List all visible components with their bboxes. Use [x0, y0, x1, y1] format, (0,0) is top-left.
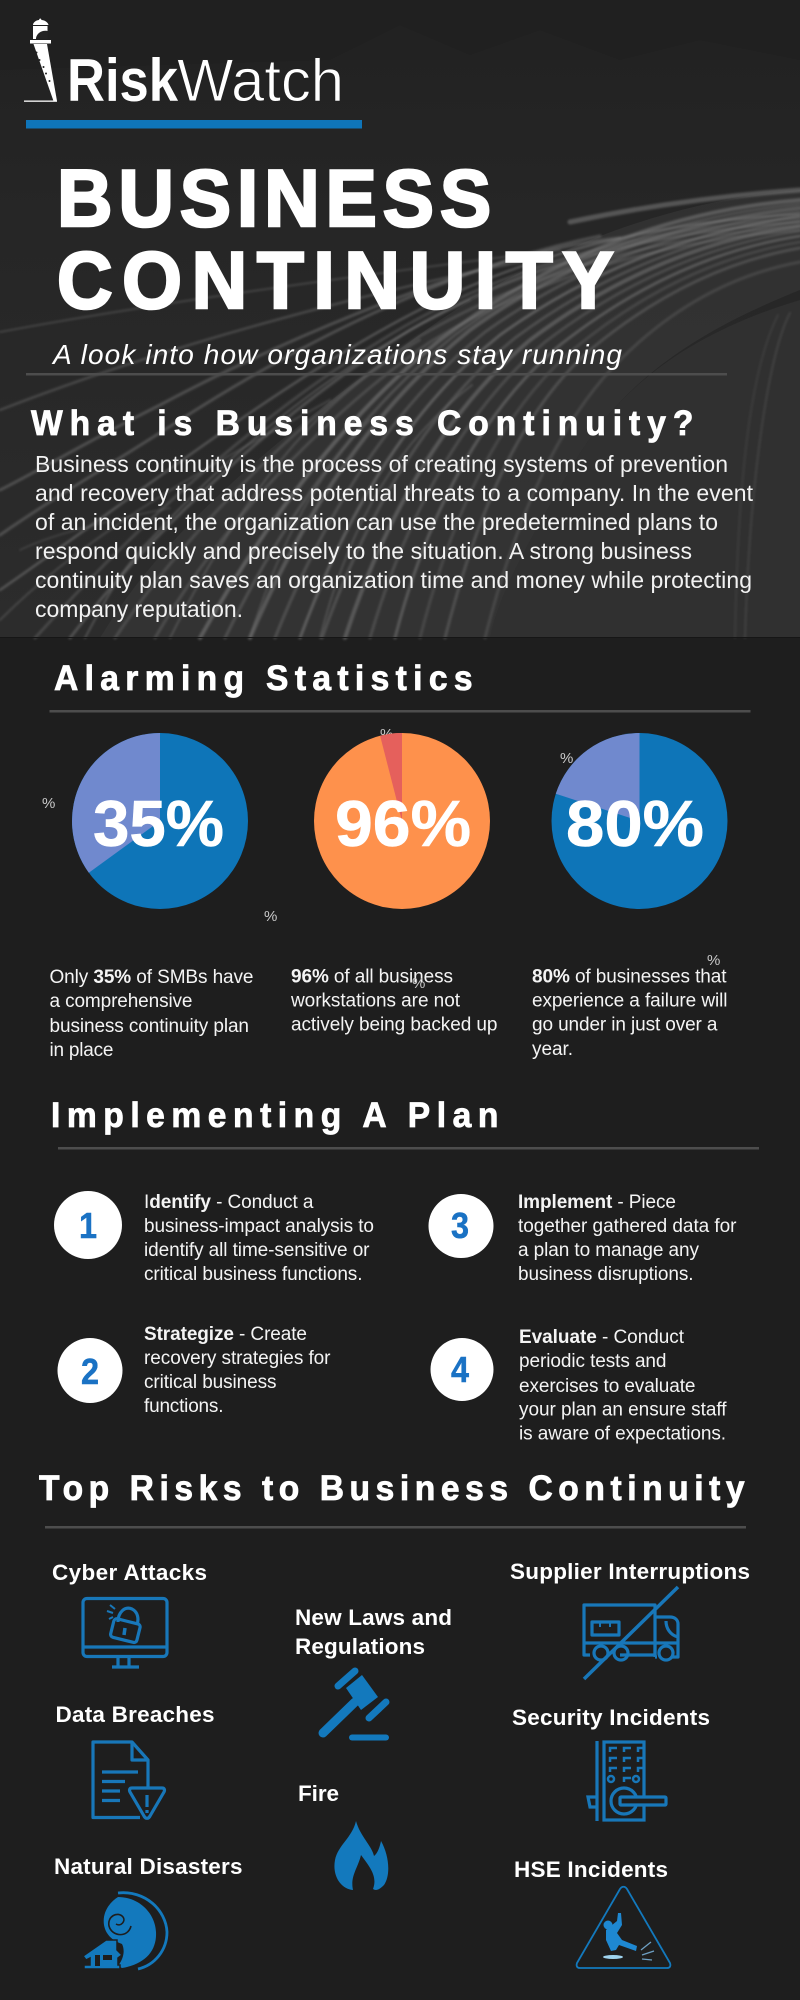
label: Fire: Fire — [298, 1781, 339, 1806]
stat text: 96% of workstations: actively being backed up — [291, 1014, 498, 1036]
icon: lighthouse — [24, 18, 57, 102]
text block: definition of business continuity: of an incident, the organization can use the predetermined plans to — [35, 509, 718, 535]
heading: Alarming Statistics: Alarming Statistics — [54, 659, 473, 698]
stray percent label over stat text: % — [412, 975, 425, 992]
stat text: 35% of SMBs: in place — [50, 1040, 114, 1061]
step 4 badge — [430, 1338, 494, 1401]
label: Natural Disasters: Natural Disasters — [54, 1854, 242, 1879]
step 4 text: periodic tests and — [519, 1351, 666, 1372]
step 2 text: Strategize - Create — [144, 1324, 307, 1345]
icon: document with warning — [93, 1742, 164, 1818]
chart: 96% pie: 96% — [335, 787, 471, 860]
text block: definition of business continuity: respond quickly and precisely to the situation. A strong business — [35, 538, 692, 564]
heading: Implementing A Plan: Implementing A Plan — [51, 1096, 498, 1135]
stat text: 35% of SMBs: a comprehensive — [50, 991, 192, 1012]
title: BUSINESS — [57, 152, 491, 243]
title: CONTINUITY — [57, 234, 614, 325]
stray percent labels: % — [380, 726, 393, 743]
heading: What is Business Continuity?: What is Business Continuity? — [31, 404, 693, 443]
stray percent labels: % — [264, 908, 277, 925]
step 4 text: Evaluate - Conduct — [519, 1327, 685, 1348]
step 2 text — [144, 1324, 331, 1417]
text: Watch: Watch — [177, 47, 344, 114]
icon: monitor with broken padlock — [83, 1598, 167, 1667]
stat text: 96% of workstations — [290, 966, 498, 1036]
step 1 text — [144, 1192, 374, 1285]
label: New Laws and Regulations — [295, 1605, 452, 1659]
label: Security Incidents: Security Incidents — [512, 1705, 710, 1730]
step 4 badge: 4 — [451, 1350, 469, 1390]
stat text: 80% of businesses: 80% of businesses that — [532, 966, 727, 988]
subtitle: A look into how organizations stay running — [51, 339, 622, 370]
step 1 text: critical business functions. — [144, 1264, 362, 1285]
chart: 35% pie — [72, 733, 248, 909]
step 4 text: exercises to evaluate — [519, 1376, 696, 1397]
step 2 text: functions. — [144, 1396, 224, 1417]
text block: definition of business continuity — [35, 451, 754, 622]
label: New Laws and Regulations: Regulations — [295, 1634, 425, 1659]
chart: 35% pie: 35% — [93, 787, 224, 860]
stray percent labels: % — [42, 795, 55, 812]
icon: tidal wave over house — [83, 1893, 167, 1969]
chart: 96% pie — [314, 733, 490, 909]
text: Risk: Risk — [67, 47, 179, 114]
label: New Laws and Regulations: New Laws and — [295, 1605, 452, 1630]
label: HSE Incidents: HSE Incidents — [514, 1857, 668, 1882]
stat text: 80% of businesses: year. — [532, 1039, 573, 1060]
step 2 badge: 2 — [81, 1352, 99, 1392]
stray percent labels: % — [707, 952, 720, 969]
step 3 text — [518, 1192, 737, 1285]
step 3 text: Implement - Piece — [518, 1192, 676, 1213]
text block: definition of business continuity: Business continuity is the process of creating systems of prevention — [35, 451, 728, 477]
step 1 text: Identify - Conduct a — [144, 1192, 314, 1213]
stat text: 80% of businesses: experience a failure will — [532, 990, 728, 1012]
step 3 badge: 3 — [451, 1206, 469, 1246]
icon: truck crossed out — [584, 1587, 678, 1679]
step 4 text: is aware of expectations. — [519, 1424, 726, 1444]
step 1 text: identify all time-sensitive or — [144, 1240, 370, 1261]
text block: definition of business continuity: continuity plan saves an organization time and money while protecting — [35, 567, 752, 593]
step 3 badge — [428, 1194, 494, 1258]
label: Cyber Attacks: Cyber Attacks — [52, 1560, 207, 1585]
chart: 80% pie — [552, 733, 728, 909]
step 2 text: critical business — [144, 1372, 276, 1393]
heading: Top Risks to Business Continuity: Top Risks to Business Continuity — [39, 1469, 745, 1508]
stat text: 80% of businesses: go under in just over a — [532, 1014, 718, 1036]
icon: flame — [334, 1821, 388, 1890]
stray percent labels: % — [560, 750, 573, 767]
stray percent labels — [42, 726, 720, 969]
stat text: 35% of SMBs — [50, 967, 254, 1061]
step 1 badge: 1 — [79, 1206, 97, 1246]
stat text: 96% of workstations: workstations are not — [290, 990, 461, 1012]
text block: definition of business continuity: company reputation. — [35, 596, 243, 622]
step 1 text: business-impact analysis to — [144, 1216, 374, 1237]
logo underline bar — [26, 120, 362, 128]
step 1 badge — [54, 1191, 122, 1259]
icon: slip hazard triangle — [577, 1887, 670, 1968]
label: Data Breaches: Data Breaches — [56, 1702, 214, 1727]
text block: definition of business continuity: and recovery that address potential threats to a company. In the event — [35, 480, 754, 506]
logo: RiskWatch — [24, 18, 344, 114]
step 3 text: business disruptions. — [518, 1264, 694, 1285]
stat text: 35% of SMBs: Only 35% of SMBs have — [50, 967, 254, 988]
stat text: 80% of businesses — [532, 966, 728, 1060]
panel: header photo of highway light trails — [0, 0, 800, 638]
step 4 text: your plan an ensure staff — [519, 1400, 727, 1420]
stat text: 35% of SMBs: business continuity plan — [50, 1016, 249, 1037]
stat text: 96% of workstations: 96% of all business — [291, 966, 453, 988]
step 2 badge — [58, 1338, 122, 1403]
icon: gavel — [323, 1671, 386, 1738]
icon: keypad door lock — [588, 1741, 666, 1821]
step 3 text: a plan to manage any — [518, 1240, 700, 1261]
label: Supplier Interruptions: Supplier Interruptions — [510, 1559, 750, 1584]
step 4 text — [519, 1327, 727, 1444]
title — [57, 152, 614, 325]
chart: 80% pie: 80% — [566, 787, 704, 860]
step 2 text: recovery strategies for — [144, 1348, 331, 1369]
step 3 text: together gathered data for — [518, 1216, 737, 1237]
